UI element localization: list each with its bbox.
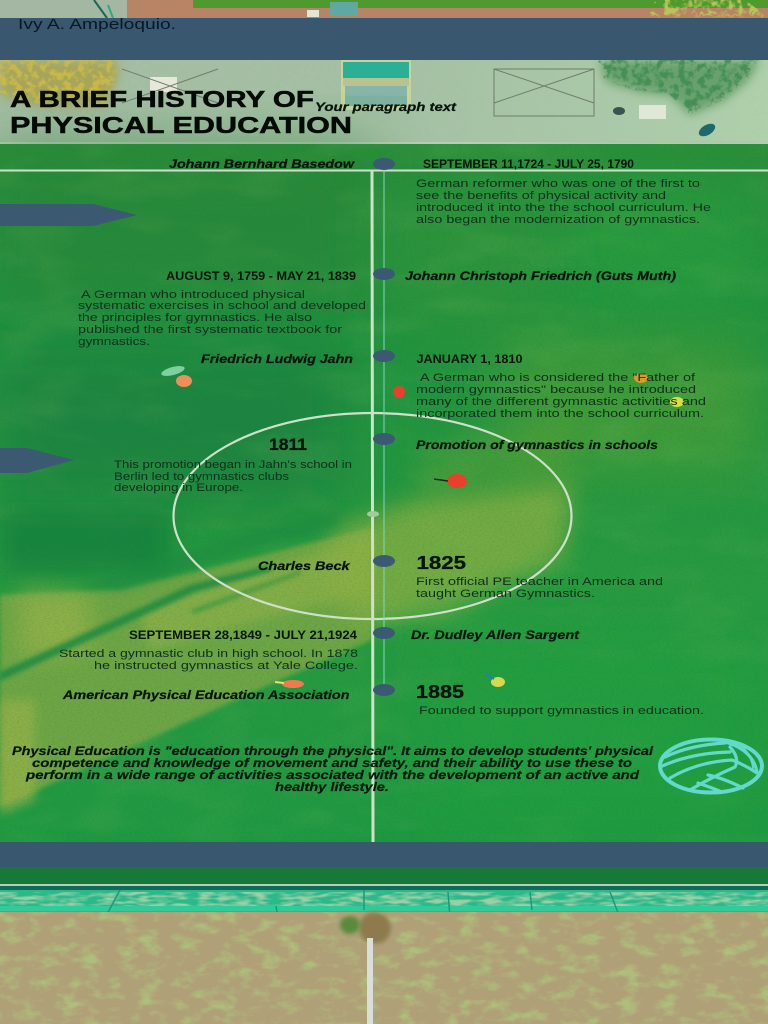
entry: 1811: This promotion began in Jahn's school in <box>114 459 352 471</box>
definition paragraph: healthy lifestyle. <box>275 782 389 794</box>
entry: Guts Muth <box>78 271 676 348</box>
entry: 1811: developing in Europe. <box>114 482 243 494</box>
entry: Basedow <box>169 159 711 226</box>
entry: 1825 Charles Beck: Charles Beck <box>258 561 350 573</box>
entry: Jahn <box>201 354 706 420</box>
entry: 1885 association: Founded to support gymnastics in education. <box>419 705 704 717</box>
dirt ground <box>0 912 768 1024</box>
entry: Basedow: see the benefits of physical activity and <box>416 190 666 202</box>
entry: Basedow: also began the modernization of gymnastics. <box>416 214 700 226</box>
entry: 1811: Promotion of gymnastics in schools <box>416 440 658 452</box>
entry: Guts Muth: the principles for gymnastics. He also <box>78 312 312 324</box>
entry: Jahn: incorporated them into the school curriculum. <box>416 408 704 420</box>
entry: 1811: 1811 <box>269 435 307 454</box>
entry: Basedow: Johann Bernhard Basedow <box>169 159 355 171</box>
entry: 1825 Charles Beck <box>258 553 663 600</box>
icon: volleyball <box>660 740 762 792</box>
timeline dot 1 <box>373 158 395 170</box>
timeline dot 5 <box>373 555 395 567</box>
timeline dot 6 <box>373 627 395 639</box>
entry: 1825 Charles Beck: First official PE teacher in America and <box>416 576 663 588</box>
entry: 1811: Berlin led to gymnastics clubs <box>114 471 290 483</box>
entry: Dudley Allen Sargent: Dr. Dudley Allen Sargent <box>411 630 580 642</box>
entry: Guts Muth: AUGUST 9, 1759 - MAY 21, 1839 <box>166 271 356 283</box>
definition paragraph: perform in a wide range of activities associated with the development of an active and <box>25 770 640 782</box>
entry: Guts Muth: published the first systematic textbook for <box>78 324 342 336</box>
entry: Jahn: A German who is considered the "Father of <box>420 372 696 384</box>
entry: Guts Muth: Johann Christoph Friedrich (Guts Muth) <box>405 271 676 283</box>
entry: 1811 <box>114 435 658 494</box>
entry: Jahn: many of the different gymnastic activities and <box>416 396 706 408</box>
entry: Basedow: SEPTEMBER 11,1724 - JULY 25, 1790 <box>423 159 634 171</box>
entry: Guts Muth: A German who introduced physical <box>81 289 305 301</box>
title <box>10 86 352 138</box>
timeline dot 2 <box>373 268 395 280</box>
net and fence <box>0 884 768 918</box>
entry: Dudley Allen Sargent: Started a gymnastic club in high school. In 1878 <box>59 648 358 660</box>
definition paragraph: competence and knowledge of movement and safety, and their ability to use these to <box>32 758 632 770</box>
entry: Dudley Allen Sargent <box>59 630 580 672</box>
entry: 1825 Charles Beck: taught German Gymnastics. <box>416 588 595 600</box>
entry: Jahn: JANUARY 1, 1810 <box>416 354 522 366</box>
definition paragraph: Physical Education is "education through the physical". It aims to develop students' physical <box>12 746 654 758</box>
title: A BRIEF HISTORY OF <box>10 86 314 112</box>
entry: Guts Muth: systematic exercises in school and developed <box>78 300 366 312</box>
entry: 1825 Charles Beck: 1825 <box>416 553 466 573</box>
timeline dot 4 <box>373 433 395 445</box>
definition paragraph <box>12 746 654 794</box>
arrow shape: lower left <box>0 448 74 473</box>
paved plaza <box>0 60 768 144</box>
title: PHYSICAL EDUCATION <box>10 112 352 138</box>
arrow shape: upper left <box>0 204 137 226</box>
entry: Basedow: German reformer who was one of the first to <box>416 178 700 190</box>
timeline <box>373 158 395 696</box>
timeline dot 3 <box>373 350 395 362</box>
entry: 1885 association <box>62 682 704 717</box>
players on the pitch <box>160 364 684 688</box>
top strip: paving, track and grass <box>0 0 768 18</box>
footer band <box>0 842 768 867</box>
entry: Jahn: Friedrich Ludwig Jahn <box>201 354 353 366</box>
green field <box>0 144 768 885</box>
author name: Ivy A. Ampeloquio. <box>18 17 176 33</box>
entry: Jahn: modern gymnastics" because he introduced <box>416 384 696 396</box>
timeline dot 7 <box>373 684 395 696</box>
entry: Dudley Allen Sargent: SEPTEMBER 28,1849 - JULY 21,1924 <box>129 630 358 642</box>
entry: Basedow: introduced it into the the school curriculum. He <box>416 202 711 214</box>
header band <box>0 18 768 60</box>
entry: 1885 association: American Physical Education Association <box>62 690 350 702</box>
entry: 1885 association: 1885 <box>416 682 464 702</box>
pitch lines <box>0 170 768 842</box>
entry: Guts Muth: gymnastics. <box>78 336 150 348</box>
entry: Dudley Allen Sargent: he instructed gymnastics at Yale College. <box>94 660 358 672</box>
placeholder paragraph text: Your paragraph text <box>315 102 457 114</box>
